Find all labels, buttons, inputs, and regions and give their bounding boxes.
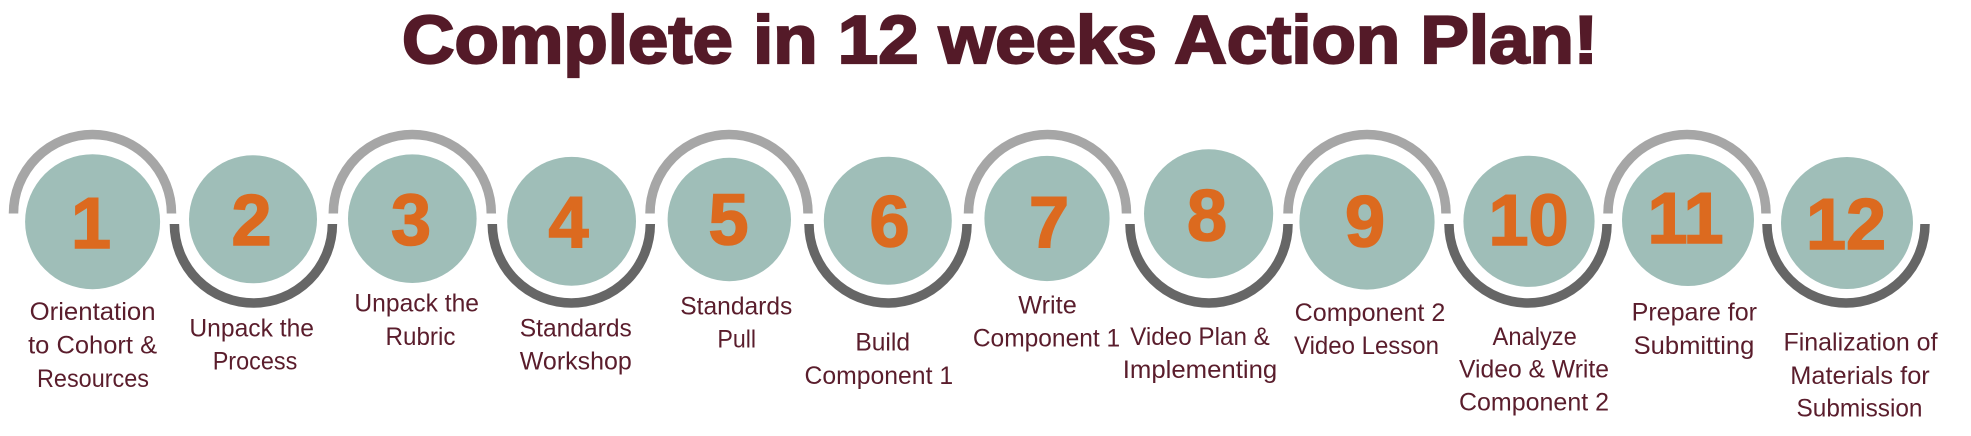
arc: top	[1288, 135, 1446, 214]
number 5: 5	[708, 180, 749, 260]
arc: bottom	[492, 224, 650, 303]
label	[189, 315, 314, 376]
number 3: 3	[391, 180, 431, 260]
number 12: 12	[1806, 185, 1886, 265]
arc: bottom	[1767, 224, 1925, 303]
arc: top	[14, 135, 172, 214]
arc: top	[1608, 135, 1766, 214]
number 7: 7	[1029, 183, 1069, 263]
step 5	[650, 135, 808, 354]
circle	[668, 158, 791, 281]
title: Complete in 12 weeks Action Plan!	[402, 2, 1598, 78]
label: Finalization of	[1784, 329, 1938, 357]
circle	[507, 157, 636, 286]
circle	[25, 154, 160, 289]
arc: top	[650, 135, 808, 214]
circle	[1144, 149, 1273, 278]
step 1	[14, 135, 172, 393]
step 12	[1767, 157, 1938, 423]
label	[354, 290, 479, 351]
circle	[1299, 154, 1435, 290]
label: Video & Write	[1459, 356, 1609, 384]
label	[1123, 323, 1277, 384]
circle	[348, 154, 477, 283]
number 1: 1	[71, 184, 111, 264]
circle	[189, 155, 317, 283]
number 6: 6	[869, 182, 910, 262]
number 11: 11	[1647, 179, 1724, 259]
label: Submission	[1796, 395, 1922, 423]
label: Video Lesson	[1294, 332, 1439, 360]
circle	[984, 156, 1110, 281]
label: Unpack the	[354, 290, 479, 318]
label: Component 2	[1295, 299, 1445, 327]
arc: bottom	[809, 224, 967, 303]
step 8	[1123, 149, 1288, 384]
label: Standards	[680, 293, 792, 321]
circle	[1781, 157, 1913, 289]
step 9	[1288, 135, 1446, 360]
circle	[824, 157, 952, 285]
label	[520, 315, 632, 376]
step 6	[804, 157, 967, 390]
label	[1294, 299, 1445, 360]
label	[28, 298, 157, 393]
number 10: 10	[1488, 181, 1569, 261]
step 2	[174, 155, 332, 376]
step 10	[1449, 156, 1609, 417]
step 4	[492, 157, 650, 376]
number 2: 2	[231, 181, 272, 261]
circle	[1622, 154, 1754, 286]
circle	[1463, 156, 1595, 287]
label: Rubric	[386, 323, 456, 351]
label: Analyze	[1493, 323, 1577, 351]
number 8: 8	[1187, 176, 1227, 256]
label: Materials for	[1790, 362, 1930, 390]
label: Prepare for	[1632, 299, 1757, 327]
label: Component 1	[973, 325, 1120, 353]
label	[1459, 323, 1609, 417]
arc: top	[968, 135, 1126, 214]
label	[1632, 299, 1757, 360]
number 4: 4	[548, 183, 589, 263]
label	[1784, 329, 1938, 423]
label: Implementing	[1123, 356, 1277, 384]
label: Resources	[37, 365, 149, 393]
label	[680, 293, 792, 354]
arc: top	[333, 135, 491, 214]
label	[973, 292, 1120, 353]
label: Component 2	[1459, 389, 1609, 417]
label: Orientation	[30, 298, 156, 326]
number 9: 9	[1345, 182, 1385, 262]
label: Unpack the	[189, 315, 314, 343]
label: Submitting	[1634, 332, 1754, 360]
arc: bottom	[174, 224, 332, 303]
step 7	[968, 135, 1126, 353]
step 3	[333, 135, 491, 351]
label: Process	[213, 348, 297, 376]
arc: bottom	[1449, 224, 1607, 303]
label	[804, 329, 953, 390]
label: Pull	[717, 326, 756, 354]
arc: bottom	[1130, 224, 1288, 303]
label: Component 1	[804, 362, 953, 390]
label: Build	[855, 329, 910, 357]
label: Standards	[520, 315, 632, 343]
label: Write	[1018, 292, 1077, 320]
label: Workshop	[520, 348, 632, 376]
label: to Cohort &	[28, 332, 157, 360]
step 11	[1608, 135, 1766, 360]
label: Video Plan &	[1130, 323, 1270, 351]
